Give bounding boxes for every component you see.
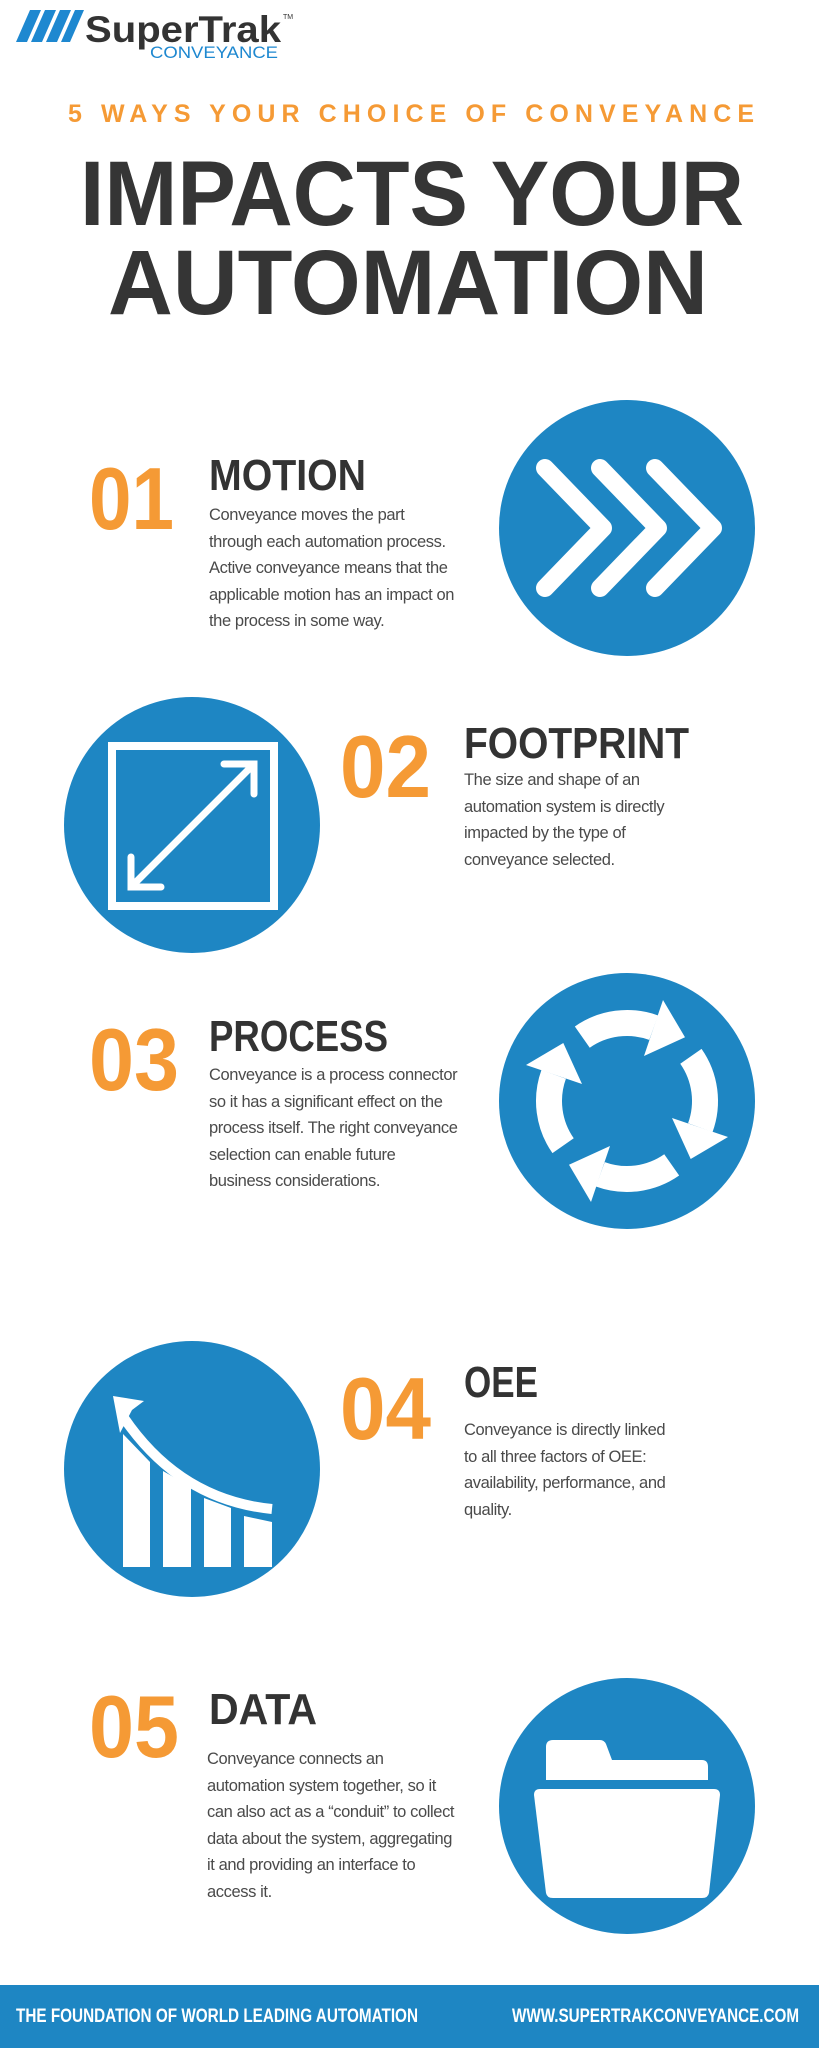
icon: resize square [64,697,320,953]
text: oee body: to all three factors of OEE: [464,1448,646,1466]
logo wordmark: SuperTrak [85,9,281,50]
icon: logo stripes [16,10,84,42]
section 04: oee [64,1341,665,1597]
heading footprint: FOOTPRINT [464,719,689,768]
text: process body: selection can enable future [209,1146,395,1164]
logo: CONVEYANCE [150,43,278,62]
subtitle: 5 WAYS YOUR CHOICE OF CONVEYANCE [68,100,754,128]
number 02: 02 [340,717,431,816]
logo [16,9,293,62]
text: oee body: availability, performance, and [464,1474,665,1492]
text: footprint body: impacted by the type of [464,824,625,842]
text: motion body: Conveyance moves the part [209,506,404,524]
heading process: PROCESS [209,1012,388,1061]
number 01: 01 [89,449,174,548]
heading oee: OEE [464,1358,538,1407]
logo: TM [283,14,293,21]
icon: chevrons [499,400,755,656]
number 04: 04 [340,1359,431,1458]
text: motion body: Active conveyance means that the [209,559,448,577]
heading motion: MOTION [209,451,366,500]
section 02: footprint [64,697,689,953]
text: motion body: applicable motion has an impact on [209,586,454,604]
text: data body: Conveyance connects an [207,1750,384,1768]
section 01: motion [89,400,755,656]
text: footprint body: conveyance selected. [464,851,615,869]
text: data body: can also act as a “conduit” to collect [207,1803,454,1821]
icon: cycle arrows [499,973,755,1229]
text: data body: data about the system, aggregating [207,1830,452,1848]
text: oee body: Conveyance is directly linked [464,1421,665,1439]
text: process body: Conveyance is a process connector [209,1066,457,1084]
text: motion body: through each automation process. [209,533,446,551]
number 03: 03 [89,1010,179,1109]
text: oee body: quality. [464,1501,512,1519]
title [80,150,744,322]
section 03: process [89,973,755,1229]
icon: chart with arrow [64,1341,320,1597]
text: motion body: the process in some way. [209,612,384,630]
heading data: DATA [209,1685,317,1734]
number 05: 05 [89,1677,179,1776]
text: process body [209,1066,458,1190]
footer [0,1985,819,2048]
text: data body: access it. [207,1883,272,1901]
text: process body: so it has a significant effect on the [209,1093,442,1111]
text: motion body [209,506,454,630]
text: footprint body: The size and shape of an [464,771,640,789]
text: oee body [464,1421,665,1519]
icon: folder [499,1678,755,1934]
text: process body: process itself. The right conveyance [209,1119,458,1137]
section 05: data [89,1677,755,1934]
text: footprint body: automation system is directly [464,798,664,816]
text: data body: automation system together, so it [207,1777,436,1795]
text: process body: business considerations. [209,1172,380,1190]
footer tagline: THE FOUNDATION OF WORLD LEADING AUTOMATION [16,2006,418,2027]
text: footprint body [464,771,665,869]
text: data body [207,1750,454,1901]
text: data body: it and providing an interface to [207,1856,415,1874]
